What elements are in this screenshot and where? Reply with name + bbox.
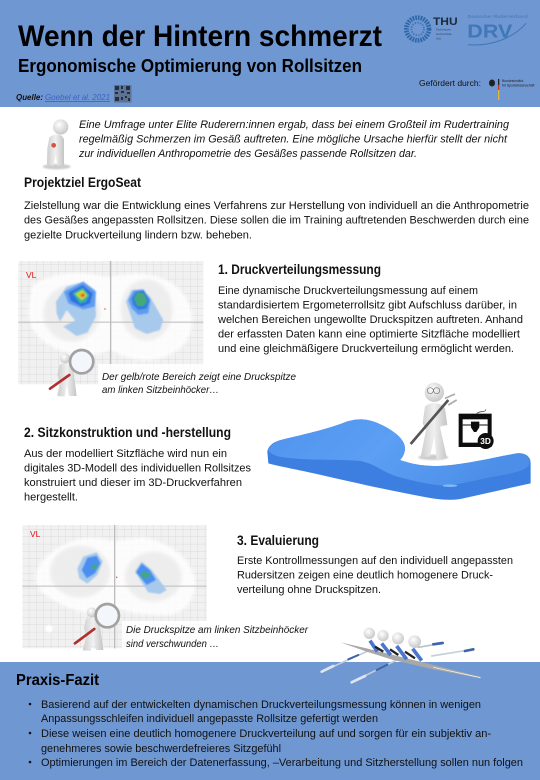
intro text: Eine Umfrage unter Elite Ruderern:innen ergab, dass bei einem Großteil im Rudertraining bbox=[79, 119, 510, 131]
logos: THU and DRV bbox=[406, 14, 528, 45]
icon: figure holding sore spot bbox=[43, 119, 71, 169]
project goal text: des Gesäßes angepassten Rollsitzen. Diese sollen die im Training auftretenden Beschwerden durch eine bbox=[24, 214, 529, 226]
section 3 text: Rudersitzen zeigen eine deutlich homogenere Druck- bbox=[237, 570, 493, 582]
section 3 text bbox=[237, 555, 513, 596]
heading: section 3: 3. Evaluierung bbox=[237, 533, 319, 548]
logo: THU text: Hochschule bbox=[436, 32, 452, 36]
logo: THU text: Technische bbox=[436, 28, 451, 32]
section 2 text: digitales 3D-Modell des individuellen Rollsitzes bbox=[24, 462, 251, 474]
intro text: zur individuellen Anthropometrie des Gesäßes passende Rollsitzen dar. bbox=[78, 148, 417, 160]
logo: THU text: THU bbox=[433, 16, 458, 28]
logo: THU text bbox=[433, 16, 458, 40]
section 1 text: der erfassten Daten kann eine optimierte Sitzfläche modelliert bbox=[218, 328, 521, 340]
project goal text: Zielstellung war die Entwicklung eines Verfahrens zur Herstellung von individuell an die Anthropometrie bbox=[24, 200, 529, 212]
icon: 3D printer bbox=[459, 409, 494, 449]
conclusion bullets: Basierend auf der entwickelten dynamischen Druckverteilungsmessung können in wenigen bbox=[41, 699, 481, 711]
section 1 text: welchen Bereichen ungewollte Druckspitzen auftreten. Anhand bbox=[217, 314, 523, 326]
icon: rowing boat bbox=[322, 628, 481, 682]
logo: THU text: Ulm bbox=[436, 36, 442, 40]
icon: engineer with caliper bbox=[411, 383, 457, 460]
project goal text: gezielte Druckverteilung lindern bzw. beheben. bbox=[24, 230, 252, 242]
section 2 text bbox=[24, 448, 251, 504]
conclusion bullets: Optimierungen im Bereich der Datenerfassung, –Verarbeitung und Sitzherstellung sollen nun folgen bbox=[41, 757, 523, 769]
heading: section 1: 1. Druckverteilungsmessung bbox=[218, 262, 381, 277]
pressure map 2 bbox=[22, 525, 207, 648]
logo: DRV: Deutscher Ruderverband bbox=[468, 14, 528, 19]
caption 2 background bbox=[122, 621, 312, 651]
section 1 text: Eine dynamische Druckverteilungsmessung auf einem bbox=[218, 285, 478, 297]
section 1 text: und eine gleichmäßigere Druckverteilung ermöglicht werden. bbox=[218, 343, 514, 355]
logo: DRV: DRV bbox=[467, 20, 513, 41]
section 2 text: konstruiert und dieser im 3D-Druckverfahren bbox=[24, 477, 242, 489]
conclusion bullets bbox=[29, 699, 523, 769]
section 2 text: Aus der modelliert Sitzfläche wird nun ein bbox=[24, 448, 227, 460]
funding note: Gefördert durch: bbox=[419, 79, 481, 88]
logo: BISp: Bundesinstitut bbox=[502, 79, 523, 83]
logo: BISp: für Sportwissenschaft bbox=[502, 84, 534, 88]
caption 2: sind verschwunden … bbox=[126, 638, 219, 650]
map label VL: VL bbox=[26, 270, 37, 280]
footer band bbox=[0, 662, 540, 780]
conclusion bullets: Diese weisen eine deutlich homogenere Druckverteilung auf und sorgen für ein subjektiv an- bbox=[41, 728, 491, 740]
logo: THU swirl bbox=[406, 18, 429, 40]
subtitle: Ergonomische Optimierung von Rollsitzen bbox=[18, 55, 362, 76]
caption 2 bbox=[126, 624, 308, 650]
caption 1: Der gelb/rote Bereich zeigt eine Druckspitze bbox=[102, 371, 296, 383]
map label VL: VL bbox=[30, 529, 41, 539]
conclusion bullets: Anpassungsschleifen individuell angepasste Rollsitze gefertigt werden bbox=[41, 713, 378, 725]
icon: 3D printer: 3D bbox=[480, 436, 491, 446]
intro text bbox=[78, 119, 510, 160]
header band bbox=[0, 0, 540, 107]
section 3 text: verteilung ohne Druckspitzen. bbox=[237, 584, 381, 596]
logo: BISp bbox=[489, 79, 534, 100]
section 3 text: Erste Kontrollmessungen auf den individuell angepassten bbox=[237, 555, 513, 567]
icon: figure with magnifier bbox=[50, 350, 93, 397]
funding note bbox=[419, 79, 534, 100]
source line: Goebel et al. 2021 bbox=[45, 93, 110, 102]
source line: Quelle: bbox=[16, 93, 43, 102]
heading: project goal: Projektziel ErgoSeat bbox=[24, 175, 141, 190]
heading: section 2: 2. Sitzkonstruktion und -herstellung bbox=[24, 425, 231, 440]
intro text: regelmäßig Schmerzen im Gesäß auftreten. Eine mögliche Ursache hierfür stellt der nicht bbox=[79, 134, 508, 146]
seat model bbox=[267, 419, 531, 500]
heading: conclusion: Praxis-Fazit bbox=[16, 672, 100, 689]
section 2 text: hergestellt. bbox=[24, 492, 78, 504]
source line bbox=[16, 93, 110, 102]
section 1 text bbox=[217, 285, 523, 355]
section 1 text: standardisiertem Ergometerrollsitz gibt Aufschluss darüber, in bbox=[218, 300, 517, 312]
caption 1 background bbox=[98, 364, 303, 398]
pressure map 1 bbox=[18, 261, 203, 384]
icon: figure with magnifier bbox=[75, 604, 119, 651]
caption 1 bbox=[102, 371, 296, 396]
caption 1: am linken Sitzbeinhöcker… bbox=[102, 384, 219, 396]
project goal text bbox=[24, 200, 529, 242]
caption 2: Die Druckspitze am linken Sitzbeinhöcker bbox=[126, 624, 308, 636]
logo: DRV bbox=[467, 14, 528, 45]
icon: QR code bbox=[114, 85, 132, 102]
conclusion bullets: genehmeres sowie beschwerdefreieres Sitzgefühl bbox=[41, 743, 281, 755]
title: Wenn der Hintern schmerzt bbox=[18, 20, 382, 53]
